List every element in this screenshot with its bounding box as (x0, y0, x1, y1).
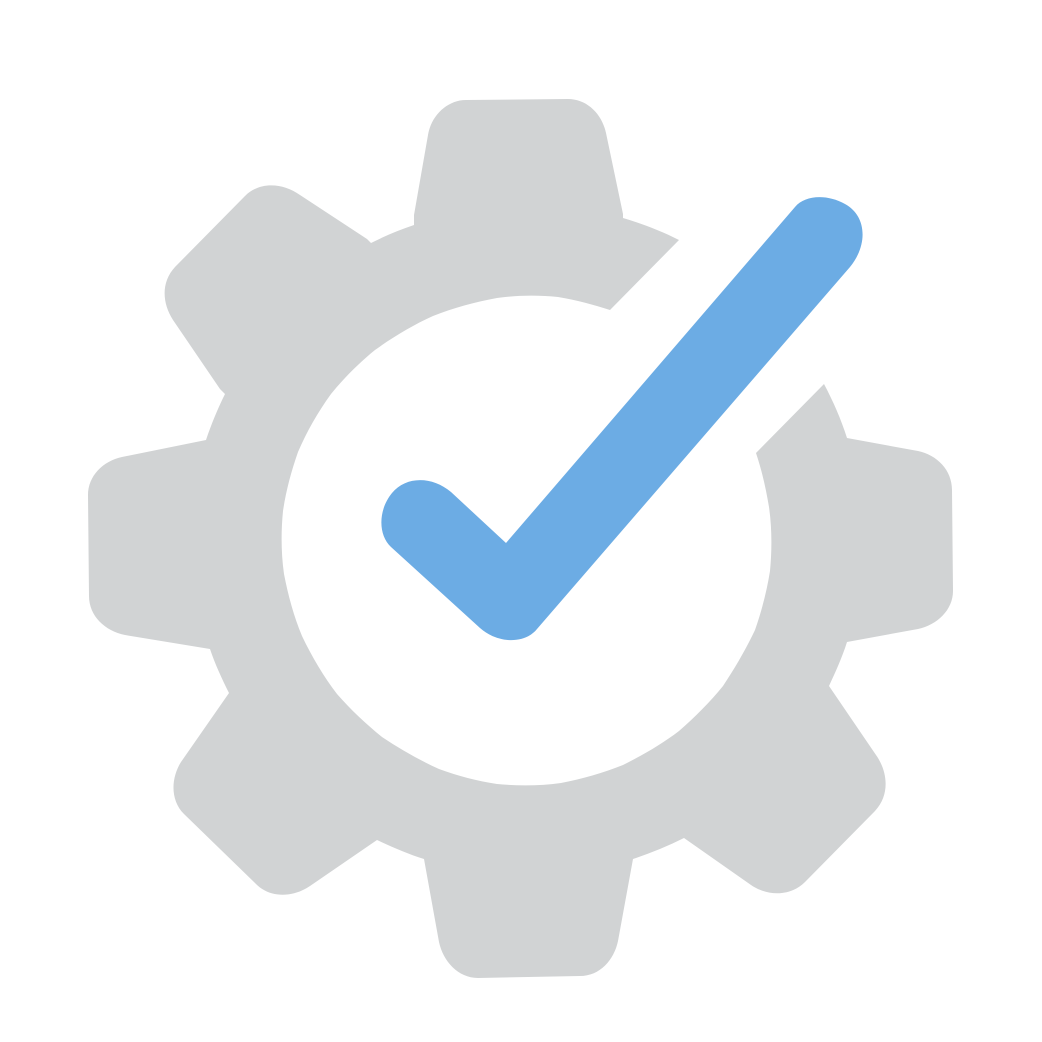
icon: gear (88, 99, 953, 978)
icon: checkmark (381, 197, 863, 640)
